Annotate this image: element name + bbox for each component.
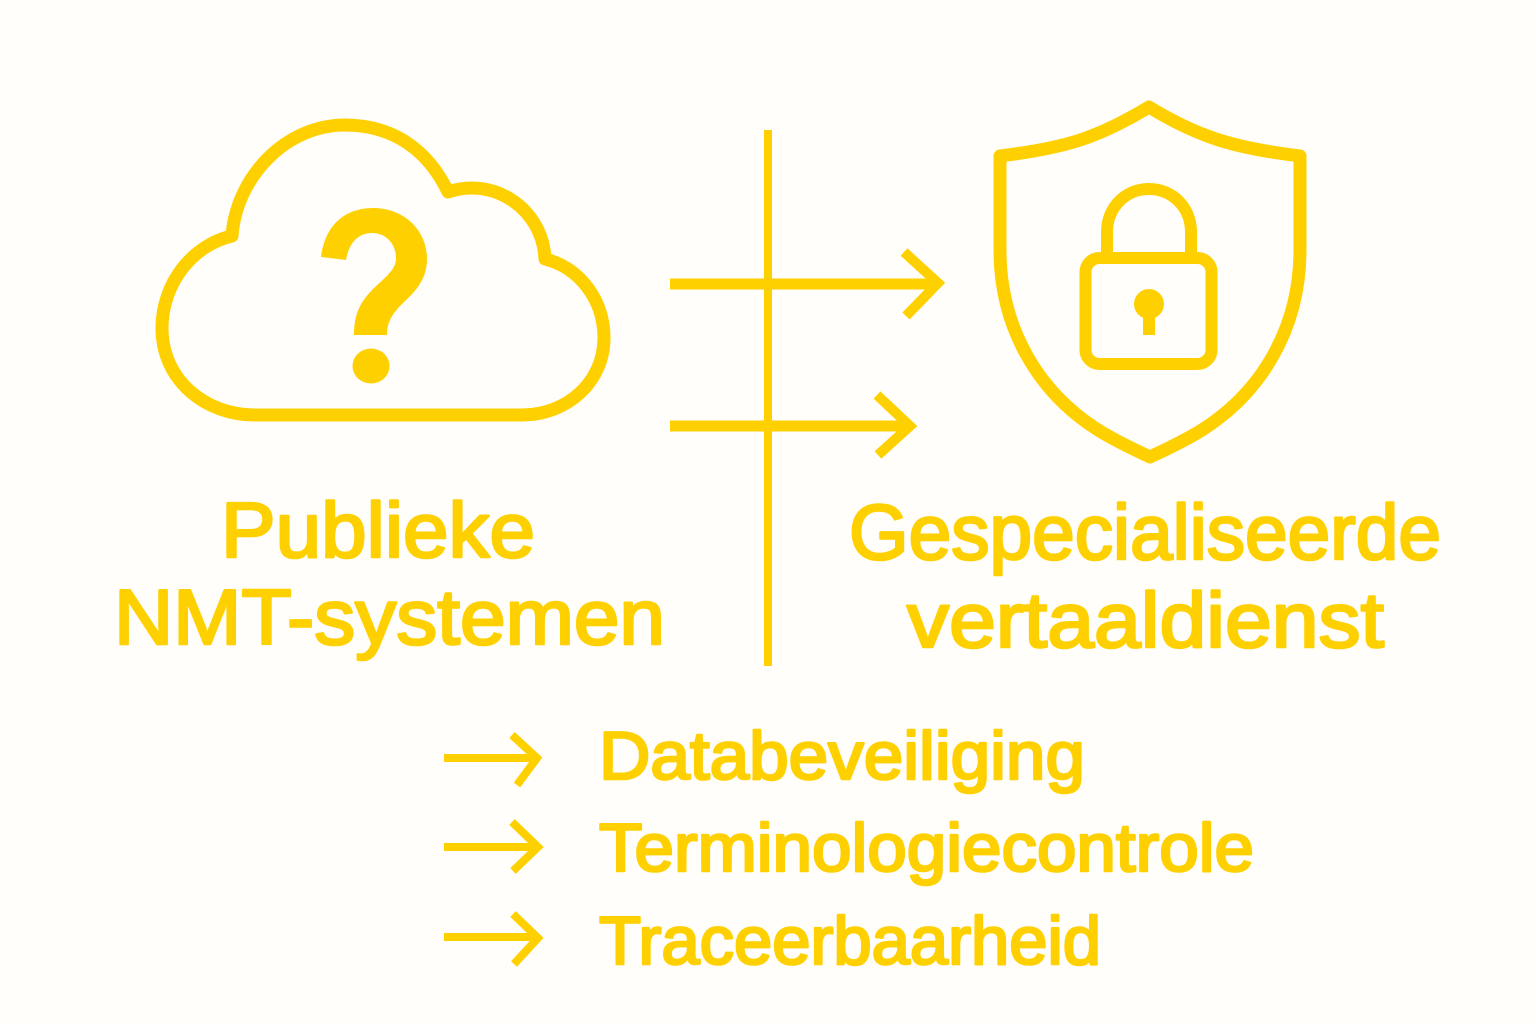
heading: public NMT systems: Publieke xyxy=(221,486,535,574)
arrow: bottom, cloud to shield xyxy=(670,395,910,455)
heading: public NMT systems xyxy=(114,486,665,661)
heading: specialised translation service: Gespecialiseerde xyxy=(849,488,1441,576)
list item: traceability: Traceerbaarheid xyxy=(599,903,1101,979)
vertical divider xyxy=(764,130,772,666)
heading: specialised translation service xyxy=(849,488,1441,664)
heading: specialised translation service: vertaaldienst xyxy=(907,576,1384,664)
list item: data security: Databeveiliging xyxy=(599,718,1085,794)
list item: terminology check: Terminologiecontrole xyxy=(599,810,1254,886)
heading: public NMT systems: NMT-systemen xyxy=(114,573,665,661)
arrow: top, cloud to shield xyxy=(670,252,938,316)
icon: cloud with question mark xyxy=(162,125,604,415)
icon: shield with padlock xyxy=(1000,107,1300,457)
